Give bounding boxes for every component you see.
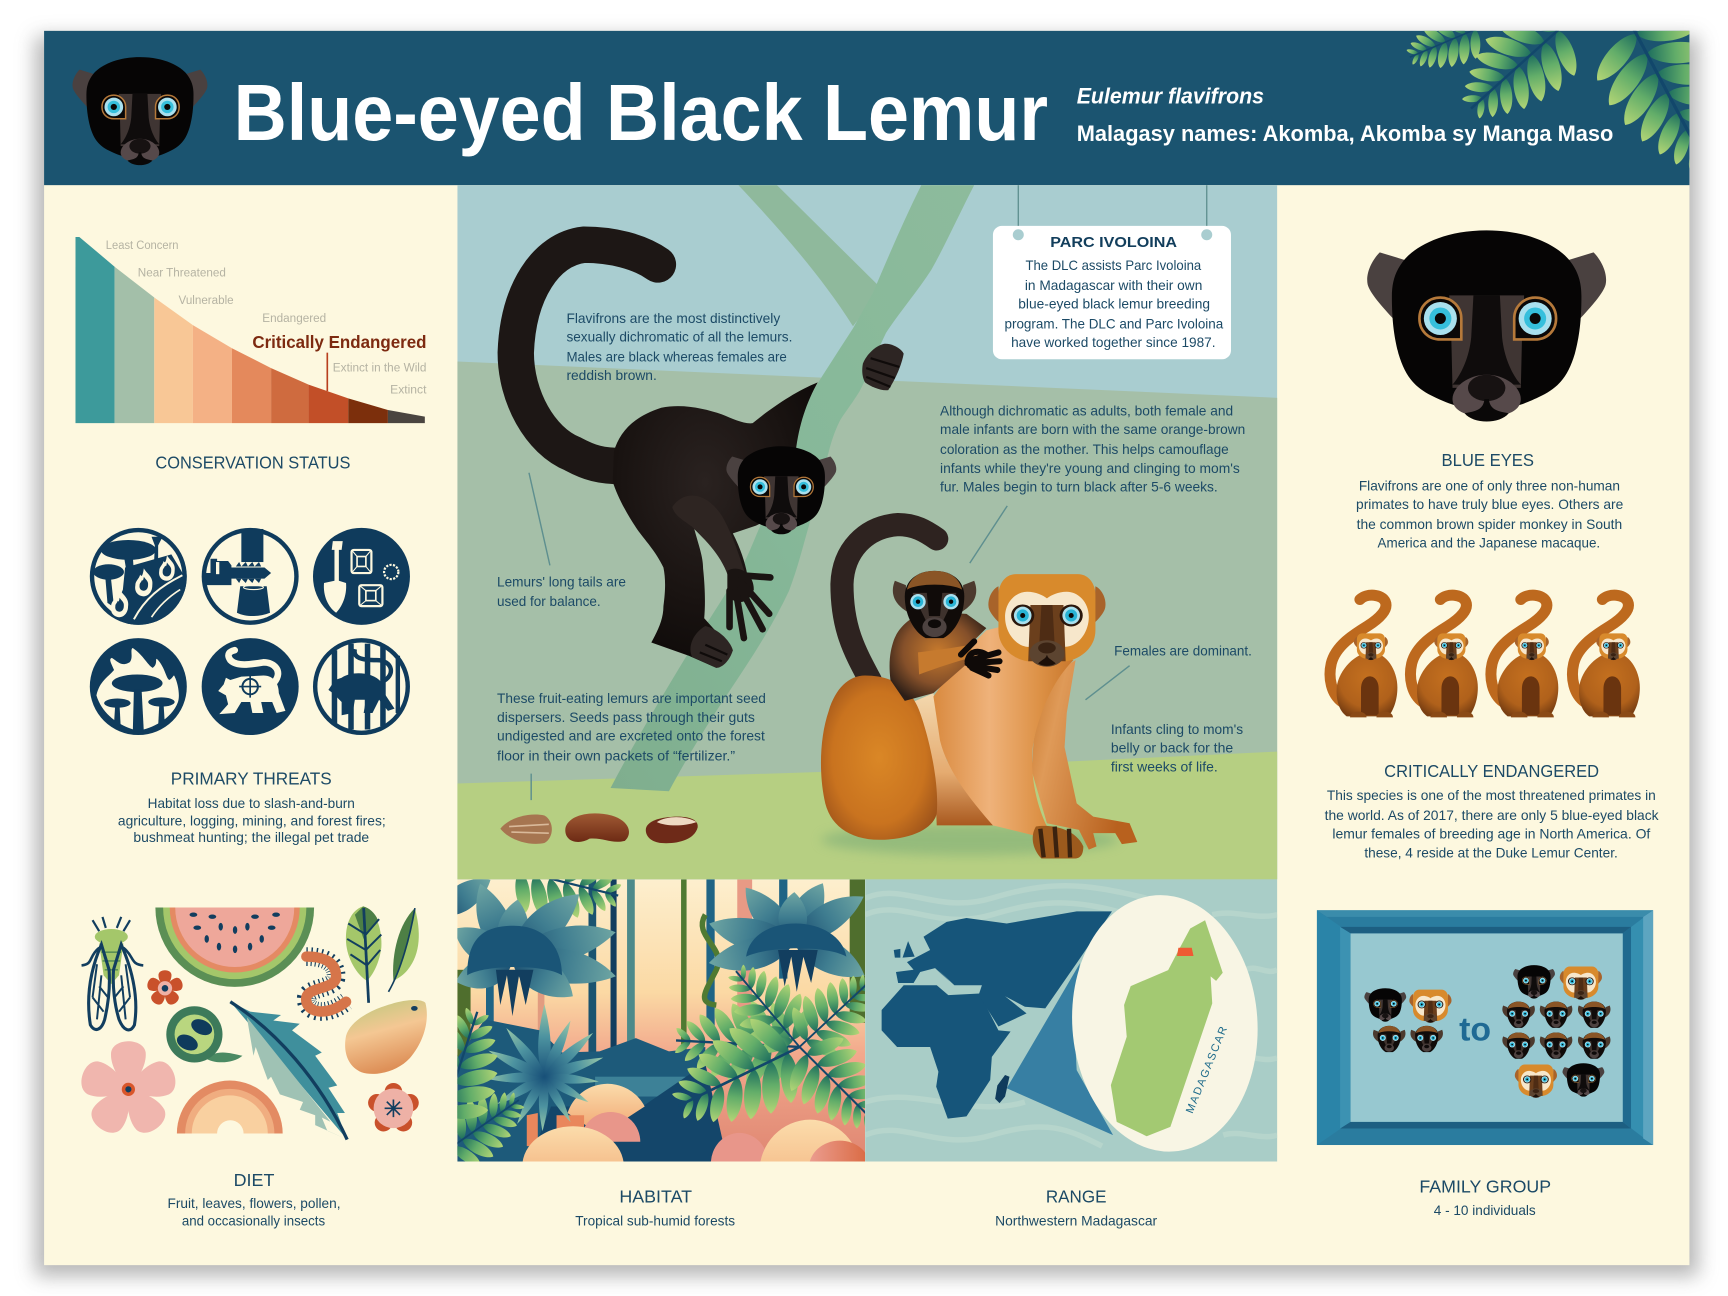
status labels: Endangered: [262, 313, 326, 325]
icon: slender leaf: [388, 908, 419, 992]
panel: blue eyes: [1356, 230, 1624, 551]
scientific name: Eulemur flavifrons: [1077, 84, 1264, 109]
text: seed dispersal: floor in their own packets of “fertilizer.”: [497, 748, 735, 763]
label: Madagascar: MADAGASCAR: [1184, 1025, 1230, 1115]
text: family group description: 4 - 10 individuals: [1434, 1203, 1536, 1218]
tree trunks: [457, 879, 865, 1124]
icon: four female lemurs: [1330, 595, 1640, 717]
panel: main lemur scene: [457, 185, 1277, 879]
text: seed dispersal: dispersers. Seeds pass through their guts: [497, 710, 755, 725]
callout: Parc Ivoloina: have worked together since 1987.: [1011, 335, 1216, 350]
panel: family group: [1317, 910, 1653, 1218]
Africa and Eurasia: [882, 911, 1112, 1119]
text: dichromatism note: reddish brown.: [566, 368, 657, 383]
icon: forest fire: [90, 638, 187, 735]
panel: conservation status: [75, 237, 427, 472]
heading: habitat: HABITAT: [619, 1187, 693, 1206]
callout: Parc Ivoloina: The DLC assists Parc Ivoloina: [1025, 258, 1202, 273]
panel: range map: [865, 879, 1277, 1162]
text: range description: Northwestern Madagascar: [995, 1213, 1158, 1228]
icon: striped leaf: [346, 906, 381, 1003]
icon: cicada: [82, 917, 143, 1030]
male lemur tail: [516, 245, 658, 466]
status labels: Near Threatened: [138, 268, 226, 280]
magnified oval: [1064, 889, 1266, 1158]
icon: millipede: [306, 957, 346, 1011]
callout line: infant: [970, 506, 1007, 563]
heading: critically endangered: CRITICALLY ENDANGERED: [1384, 762, 1599, 781]
panel: diet: [77, 906, 427, 1228]
text: diet description: and occasionally insects: [182, 1213, 325, 1228]
text: infants cling: belly or back for the: [1111, 741, 1234, 756]
icon: mango: [345, 1000, 427, 1074]
text: blue eyes description: the common brown spider monkey in South: [1357, 517, 1622, 532]
status labels: Extinct in the Wild: [333, 362, 426, 374]
header lemur face icon: [72, 57, 207, 165]
heading: diet: DIET: [234, 1171, 275, 1190]
mother lemur ground shadow: [821, 824, 1119, 855]
text: infants coloration: fur. Males begin to turn black after 5-6 weeks.: [940, 480, 1218, 495]
icon: illegal pet trade: [313, 638, 410, 735]
text: threats description: bushmeat hunting; the illegal pet trade: [133, 830, 370, 845]
text: females dominant: Females are dominant.: [1114, 644, 1252, 659]
callout line: seeds: [530, 774, 532, 800]
icon: small red flower: [146, 970, 184, 1007]
ocean: [865, 879, 1277, 1162]
callout line: tail: [529, 473, 550, 565]
branch main: [611, 185, 974, 791]
panel: habitat illustration: [457, 879, 866, 1162]
projection cone: [1007, 963, 1113, 1135]
ferns left: [457, 1008, 524, 1162]
text: infants coloration: infants while they're young and clinging to mom's: [940, 461, 1240, 476]
text: seed dispersal: These fruit-eating lemurs are important seed: [497, 691, 766, 706]
rocks left: [522, 1084, 645, 1162]
range highlight: [1177, 948, 1194, 956]
text: endangered description: This species is one of the most threatened primates in: [1327, 788, 1656, 803]
text: infants coloration: coloration as the mother. This helps camouflage: [940, 442, 1229, 457]
text: blue eyes description: Flavifrons are one of only three non-human: [1359, 478, 1620, 493]
callout: Parc Ivoloina: blue-eyed black lemur breeding: [1018, 297, 1210, 312]
callout: Parc Ivoloina: PARC IVOLOINA: [1050, 235, 1177, 251]
header banner: [44, 30, 1690, 186]
text: dichromatism note: sexually dichromatic of all the lemurs.: [566, 330, 792, 345]
Madagascar map: [1111, 920, 1223, 1136]
status labels: [106, 240, 427, 396]
icon: watermelon: [155, 908, 314, 987]
text: infants cling: Infants cling to mom's: [1111, 722, 1243, 737]
text: dichromatism note: [566, 311, 792, 383]
star plant: [486, 1004, 605, 1131]
text: infants coloration: Although dichromatic as adults, both female and: [940, 403, 1233, 418]
Malagasy names: Malagasy names: Akomba, Akomba sy Manga Maso: [1077, 121, 1613, 146]
icon: bushmeat hunting: [202, 638, 299, 735]
callout: Parc Ivoloina: [993, 185, 1231, 359]
text: endangered description: lemur females of breeding age in North America. Of: [1332, 827, 1650, 842]
small Madagascar: [995, 1075, 1009, 1103]
picture frame: [1317, 910, 1653, 1145]
text: infants coloration: [940, 403, 1245, 495]
status labels: Critically Endangered: [252, 332, 426, 352]
heading: primary threats: PRIMARY THREATS: [171, 770, 332, 789]
panel: critically endangered: [1325, 595, 1659, 860]
mountain and water: [457, 1019, 727, 1162]
text: infants cling: [1111, 722, 1243, 774]
icon: mining: [313, 528, 410, 625]
icon: feather leaf: [230, 1002, 347, 1140]
status curve chart: [75, 237, 425, 423]
heading: range: RANGE: [1046, 1187, 1106, 1206]
ocean waves: [865, 886, 1277, 1146]
lemur faces: small group: [1364, 988, 1452, 1052]
text: threats description: [118, 796, 386, 845]
text: threats description: agriculture, logging, mining, and forest fires;: [118, 813, 386, 828]
palm left: [457, 884, 616, 1016]
icon: pink flower: [77, 1041, 180, 1139]
main title: Blue-eyed Black Lemur: [234, 68, 1048, 157]
text: blue eyes description: [1356, 478, 1624, 551]
scene sky and ground: [457, 185, 1277, 879]
text: infants cling: first weeks of life.: [1111, 759, 1218, 774]
callout: Parc Ivoloina: in Madagascar with their own: [1025, 278, 1202, 293]
header leaves: [1406, 30, 1690, 168]
heading: family group: FAMILY GROUP: [1419, 1177, 1551, 1196]
mother lemur with infant: [821, 571, 1137, 858]
status labels: Extinct: [390, 384, 427, 396]
palm right: [709, 883, 865, 992]
status labels: Least Concern: [106, 240, 179, 252]
branch back: [738, 185, 882, 326]
text: threats description: Habitat loss due to slash-and-burn: [148, 796, 355, 811]
icon: three seeds: [500, 813, 698, 844]
icon: sliced fruit dome: [177, 1081, 283, 1133]
heading: conservation status: CONSERVATION STATUS: [155, 453, 350, 472]
ferns right: [672, 964, 866, 1128]
text: endangered description: the world. As of 2017, there are only 5 blue-eyed black: [1325, 808, 1659, 823]
text: blue eyes description: America and the Japanese macaque.: [1378, 536, 1600, 551]
status labels: Vulnerable: [179, 295, 234, 307]
icon: red tipped flower: [368, 1083, 419, 1131]
text: tail note: [498, 576, 626, 606]
male lemur: [613, 344, 904, 668]
text: diet description: [168, 1196, 341, 1228]
word: to: to: [1459, 1011, 1491, 1048]
text: habitat description: Tropical sub-humid forests: [575, 1213, 735, 1228]
text: infants coloration: male infants are born with the same orange-brown: [940, 422, 1245, 437]
rocks right: [710, 1120, 866, 1162]
lemur faces: large group: [1502, 965, 1610, 1098]
text: endangered description: these, 4 reside at the Duke Lemur Center.: [1364, 845, 1618, 860]
icon: logging chainsaw: [202, 528, 299, 625]
text: blue eyes description: primates to have truly blue eyes. Others are: [1356, 497, 1624, 512]
callout: Parc Ivoloina: program. The DLC and Parc Ivoloina: [1005, 316, 1224, 331]
text: endangered description: [1325, 788, 1659, 860]
icon: large male lemur face: [1367, 230, 1606, 422]
panel: primary threats: [90, 528, 410, 845]
text: dichromatism note: Males are black whereas females are: [566, 349, 787, 364]
mother lemur tail: [842, 525, 937, 681]
text: tail note: Lemurs' long tails are: [497, 574, 626, 589]
heading: blue eyes: BLUE EYES: [1441, 451, 1534, 470]
infant lemur: [890, 571, 1000, 701]
sunset sky: [457, 879, 865, 1162]
text: dichromatism note: Flavifrons are the most distinctively: [566, 311, 780, 326]
text: seed dispersal: undigested and are excreted onto the forest: [497, 729, 765, 744]
text: diet description: Fruit, leaves, flowers, pollen,: [168, 1196, 341, 1211]
icon: round green fruit: [166, 1006, 242, 1062]
text: tail note: used for balance.: [497, 594, 601, 609]
callout line: dominant: [1086, 666, 1130, 700]
icon: slash and burn: [90, 528, 187, 625]
top canopy leaves: [457, 879, 622, 918]
text: seed dispersal: [497, 691, 766, 763]
